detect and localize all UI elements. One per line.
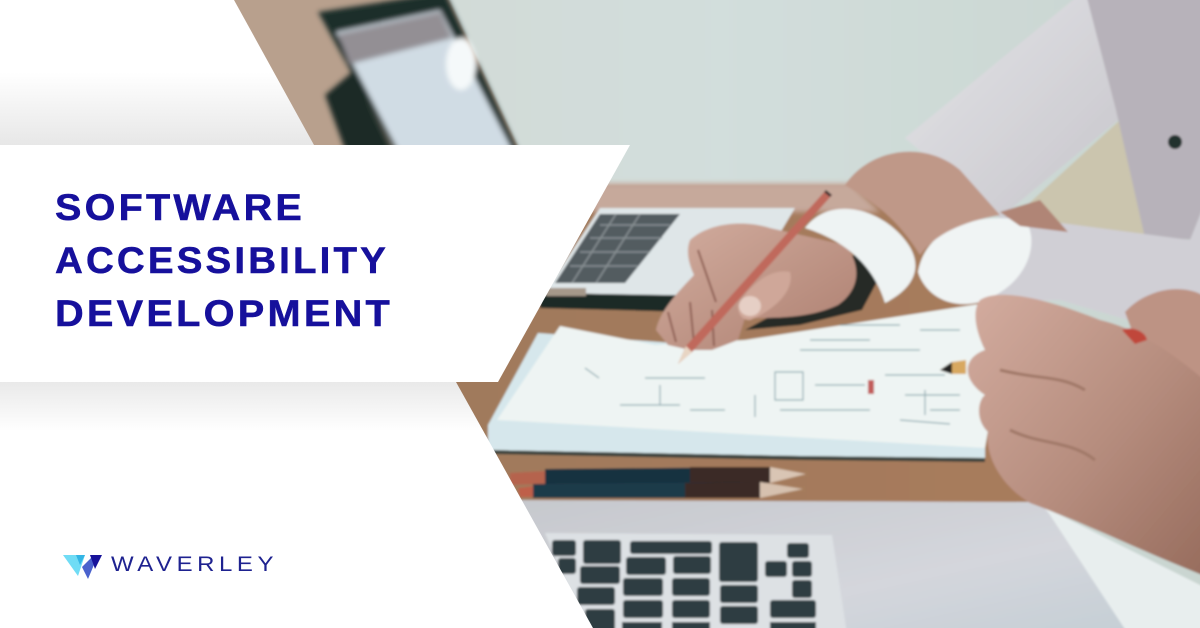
panel: lower white slanted shape <box>0 382 593 628</box>
logo wordmark: WAVERLEY <box>111 553 278 576</box>
icon: Waverley mark <box>63 555 102 579</box>
shirt cuff <box>805 209 915 303</box>
shirt of person at right <box>905 0 1200 322</box>
pencil <box>678 190 832 364</box>
panel: title banner <box>0 145 630 382</box>
logo: Waverley <box>63 553 278 579</box>
laptop keyboard keys <box>552 540 816 628</box>
paper stack <box>488 303 1002 462</box>
title: SOFTWARE <box>55 187 305 228</box>
title: ACCESSIBILITY <box>55 240 389 281</box>
foreground hand <box>968 289 1200 578</box>
pencil tip under hand <box>940 360 966 374</box>
title: DEVELOPMENT <box>55 293 393 334</box>
wood table <box>440 183 1060 530</box>
title <box>55 187 393 334</box>
front laptop <box>500 500 1200 628</box>
upper hand on arm <box>845 152 1068 255</box>
tablet <box>318 0 518 150</box>
pens <box>510 467 806 498</box>
panel: upper white slanted shape <box>0 0 314 145</box>
blurred tan backdrop behind tablet <box>220 0 1150 245</box>
back laptop <box>540 208 795 312</box>
writing hand <box>656 224 878 350</box>
